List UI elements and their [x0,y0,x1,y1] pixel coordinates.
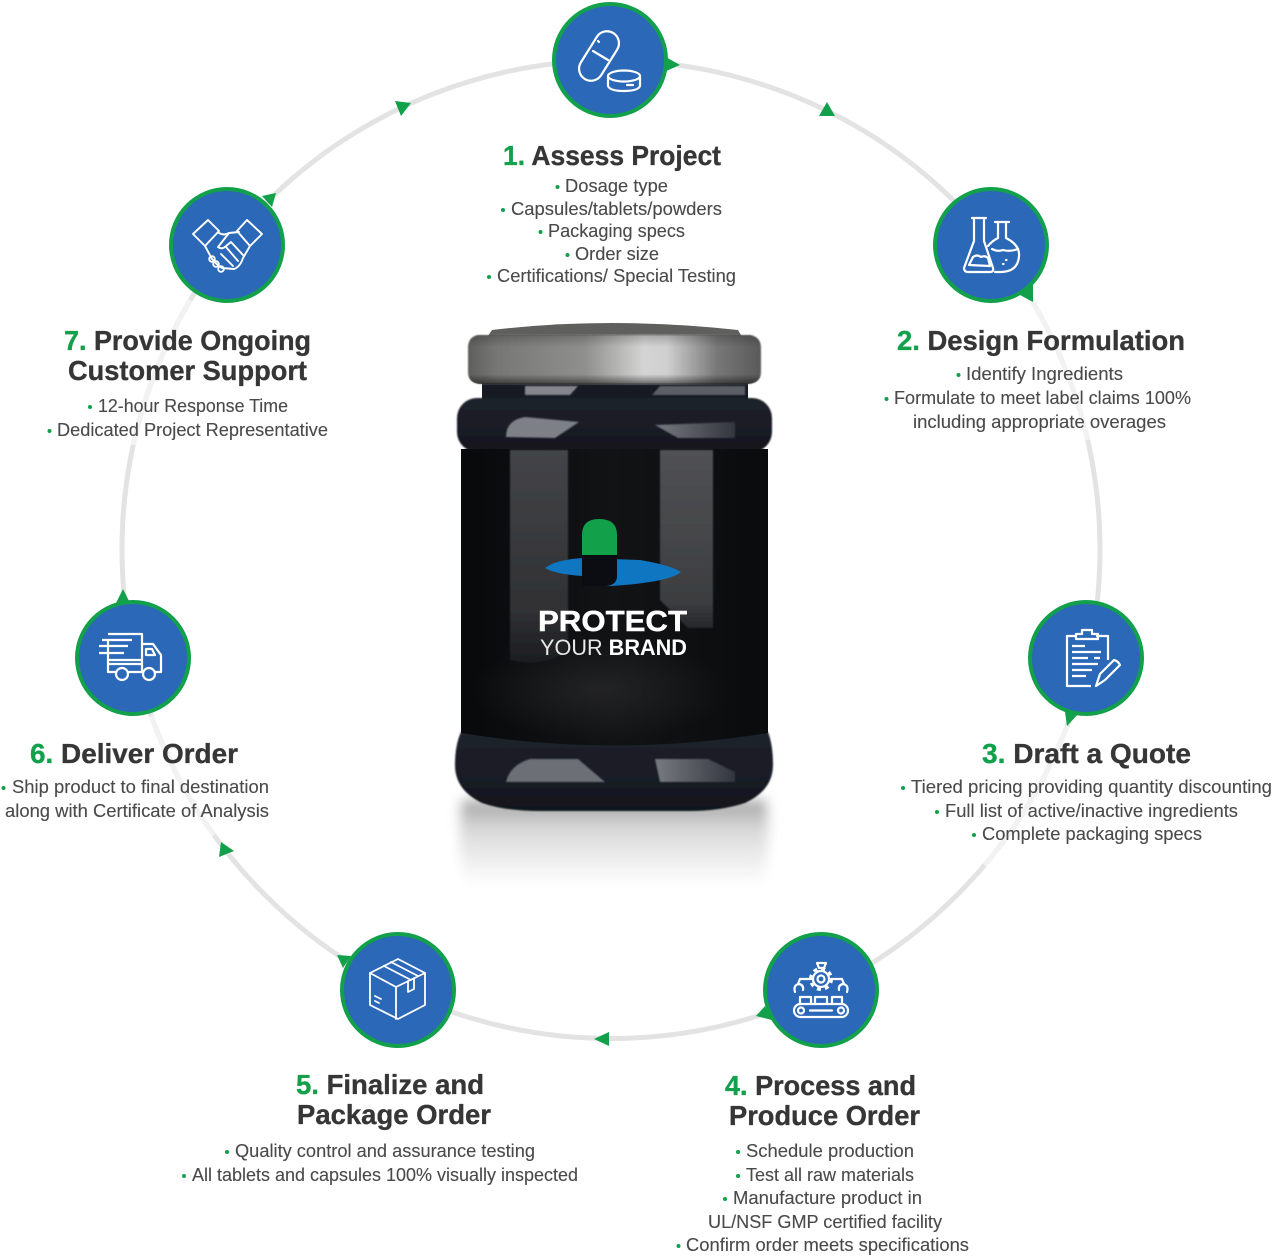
step 2 node [935,189,1047,302]
bullet list [2,777,269,821]
bullet list: Full list of active/inactive ingredients [945,801,1238,821]
pointer [664,56,680,72]
step 5 text [182,1069,578,1185]
bullet list: Complete packaging specs [982,824,1202,844]
badge [765,934,877,1046]
heading: Customer Support [68,355,307,386]
bullet list: Confirm order meets specifications [686,1235,969,1255]
badge [1030,602,1142,714]
pointer [1020,285,1033,302]
bullet list [884,364,1191,432]
badge [554,4,666,116]
step 6 text [2,738,269,821]
bullet list: Schedule production [746,1141,914,1161]
arrow: ring top right [819,102,835,116]
bullet list: Packaging specs [548,221,685,241]
icon: delivery truck [99,634,161,680]
bullet list: along with Certificate of Analysis [5,801,269,821]
bullet list: Dedicated Project Representative [57,420,328,440]
bullet list: Manufacture product in [733,1188,922,1208]
heading [64,325,311,386]
jar base [455,732,773,811]
jar highlights [506,386,745,782]
bullet list [901,777,1272,844]
process ring [122,60,1100,1038]
bullet list: Certifications/ Special Testing [497,266,736,286]
step 3 text [901,738,1272,844]
pointer [262,193,276,207]
step 3 node [1030,602,1142,726]
icon: flasks [964,218,1019,272]
bullet list: Ship product to final destination [12,777,269,797]
heading: 4. Process and [725,1070,916,1101]
step 2 text [884,325,1191,432]
step 1 node [554,4,680,116]
arrow: ring bottom [594,1032,609,1046]
heading: 6. Deliver Order [30,738,238,769]
bullet list [676,1141,969,1255]
bullet list: Dosage type [565,176,668,196]
step 4 node [756,934,877,1046]
jar reflection [460,800,768,886]
bullet list [182,1141,578,1185]
heading: Package Order [297,1099,491,1130]
brand logo [545,519,681,586]
bullet list: Quality control and assurance testing [235,1141,535,1161]
icon: handshake [193,220,262,272]
step 7 text [48,325,328,440]
badge [171,189,283,301]
heading: 3. Draft a Quote [982,738,1191,769]
icon: capsule and tablet [575,27,640,91]
icon: clipboard and pencil [1067,630,1120,686]
badge [935,189,1047,301]
badge [77,602,189,714]
icon: production line [794,963,848,1017]
bullet list: Formulate to meet label claims 100% [894,388,1191,408]
jar neck [482,380,748,404]
jar shoulder [457,398,772,452]
jar body [461,449,768,746]
bullet list: Identify Ingredients [966,364,1123,384]
bullet list: Tiered pricing providing quantity discounting [911,777,1272,797]
arrow: ring lower left [219,842,234,857]
pointer [116,589,130,603]
bullet list: Capsules/tablets/powders [511,199,722,219]
bullet list: UL/NSF GMP certified facility [708,1212,942,1232]
step 1 text [487,140,736,286]
brand tagline: YOUR BRAND [540,635,687,660]
heading [296,1069,491,1130]
product jar [455,323,773,886]
bullet list: Test all raw materials [746,1165,914,1185]
brand name: PROTECT [538,606,687,638]
pointer [1065,712,1080,726]
step 7 node [171,189,283,301]
step 5 node [337,934,454,1046]
bullet list: including appropriate overages [913,412,1166,432]
icon: package box [370,959,425,1019]
bullet list: Order size [575,244,659,264]
bullet list: 12-hour Response Time [98,396,288,416]
pointer [756,1006,772,1020]
heading: 1. Assess Project [503,140,721,171]
heading: Produce Order [729,1100,920,1131]
bullet list: All tablets and capsules 100% visually inspected [192,1165,578,1185]
heading [725,1070,920,1131]
heading: 7. Provide Ongoing [64,325,311,356]
bullet list [487,176,736,286]
pointer [337,955,351,968]
heading: 5. Finalize and [296,1069,484,1100]
jar lid [468,323,761,384]
badge [342,934,454,1046]
step 4 text [676,1070,969,1255]
heading: 2. Design Formulation [897,325,1185,356]
bullet list [48,396,328,440]
jar lower glow [470,640,730,740]
step 6 node [77,589,189,714]
arrow: ring top left [395,101,411,116]
